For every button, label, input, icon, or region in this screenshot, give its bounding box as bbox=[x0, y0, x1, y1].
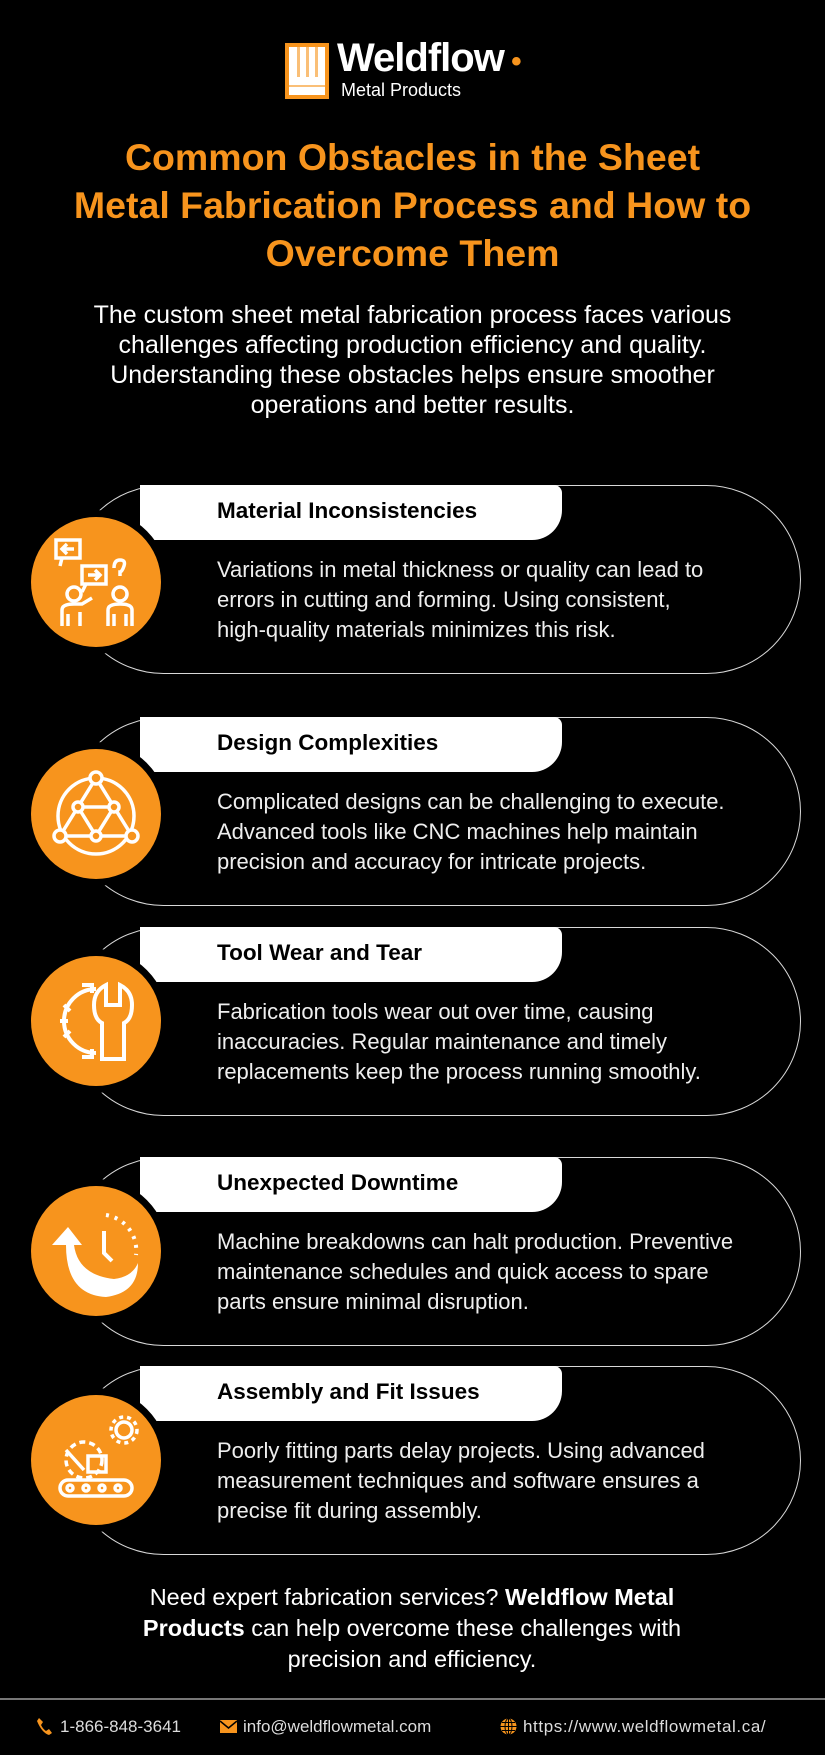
title: Common Obstacles in the Sheet bbox=[125, 136, 700, 178]
panel: assembly and fit issues bbox=[31, 1366, 801, 1555]
text block: Machine breakdowns can halt production. Preventive maintenance schedules and quick access to spare parts ensure minimal disruption. bbox=[217, 1229, 733, 1314]
title: Overcome Them bbox=[266, 232, 559, 274]
footer: website: https://www.weldflowmetal.ca/ bbox=[523, 1717, 766, 1736]
intro text: The custom sheet metal fabrication process faces various challenges affecting production efficiency and quality. Understanding these obstacles helps ensure smoother operations and better results. bbox=[94, 301, 731, 419]
icon: network triangle bbox=[31, 749, 161, 879]
panel: unexpected downtime bbox=[31, 1157, 801, 1346]
text block: Poorly fitting parts delay projects. Using advanced measurement techniques and software ensures a precise fit during assembly. bbox=[217, 1438, 705, 1523]
panel: material inconsistencies bbox=[31, 485, 801, 674]
footer: email: info@weldflowmetal.com bbox=[243, 1717, 431, 1736]
icon: clock with arrow bbox=[31, 1186, 161, 1316]
panel: assembly and fit issues: Assembly and Fit Issues bbox=[217, 1379, 480, 1404]
logo text: Weldflow • bbox=[337, 36, 521, 80]
title bbox=[74, 136, 751, 274]
panel: design complexities bbox=[31, 717, 801, 906]
text block: Fabrication tools wear out over time, causing inaccuracies. Regular maintenance and timely replacements keep the process running smoothly. bbox=[217, 999, 701, 1084]
panel: unexpected downtime: Unexpected Downtime bbox=[217, 1170, 458, 1195]
panel: design complexities: Design Complexities bbox=[217, 730, 438, 755]
panel: material inconsistencies: Material Inconsistencies bbox=[217, 498, 477, 523]
panel: tool wear and tear bbox=[31, 927, 801, 1116]
icon: logo mark bbox=[285, 43, 329, 99]
icon: gear and wrench bbox=[31, 956, 161, 1086]
text block: Variations in metal thickness or quality can lead to errors in cutting and forming. Using consistent, high‑quality materials minimizes this risk. bbox=[217, 557, 703, 642]
text block: Complicated designs can be challenging to execute. Advanced tools like CNC machines help maintain precision and accuracy for intricate projects. bbox=[217, 789, 725, 874]
footer: phone: 1-866-848-3641 bbox=[60, 1717, 181, 1736]
panel: tool wear and tear: Tool Wear and Tear bbox=[217, 940, 422, 965]
title: Metal Fabrication Process and How to bbox=[74, 184, 751, 226]
icon: people discussing bbox=[31, 517, 161, 647]
call to action: Need expert fabrication services? Weldflow Metal Products can help overcome these challenges with precision and efficiency. bbox=[143, 1584, 681, 1672]
icon: gears and conveyor bbox=[31, 1395, 161, 1525]
logo: Metal Products bbox=[341, 80, 461, 100]
logo bbox=[285, 36, 521, 100]
